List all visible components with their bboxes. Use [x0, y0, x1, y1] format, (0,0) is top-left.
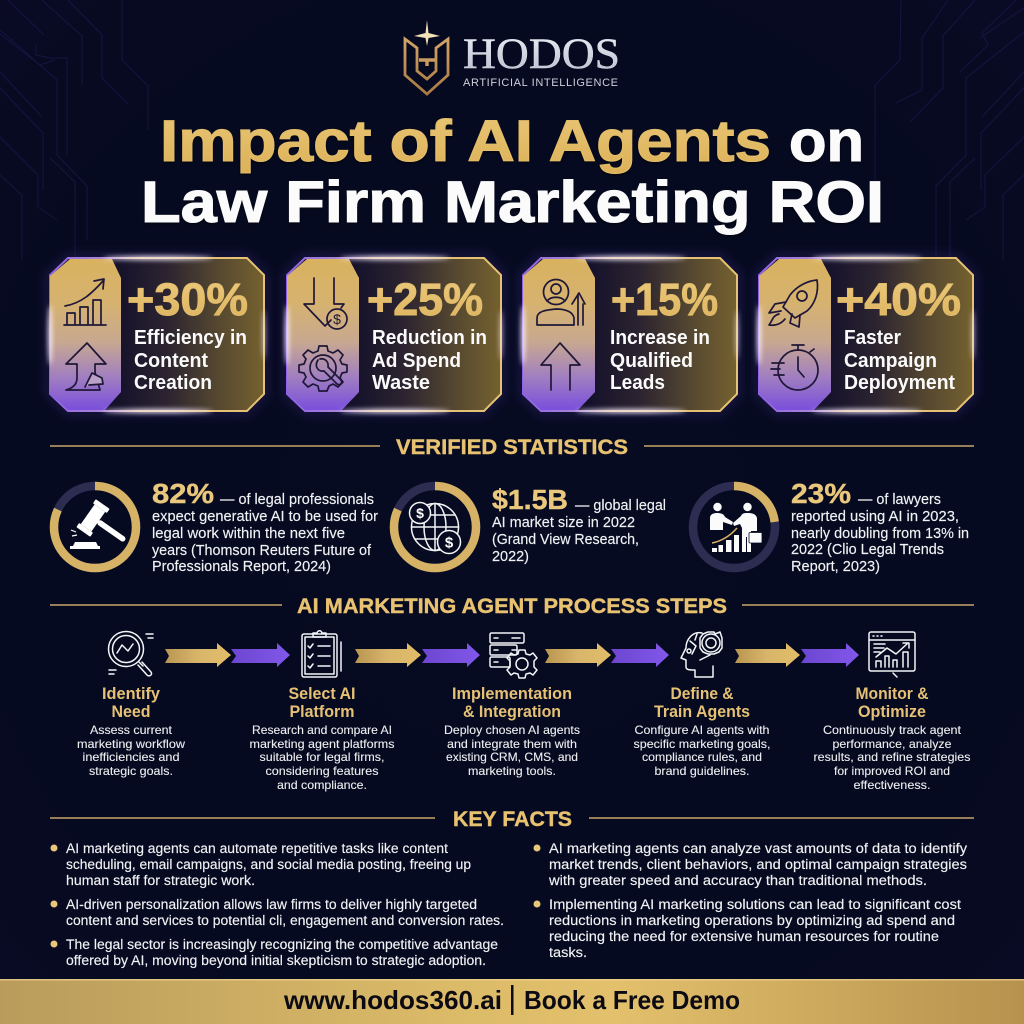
icon: analytics dashboard [869, 632, 915, 677]
step description [814, 723, 971, 792]
brand name: HODOS [463, 31, 620, 78]
stat text: — global legal [575, 497, 666, 514]
step: implementation [444, 633, 580, 778]
title: Impact of AI Agents [160, 109, 771, 174]
step: identify need [77, 632, 186, 778]
footer banner: Book a Free Demo [524, 985, 740, 1015]
stat text: — of legal professionals [220, 491, 374, 508]
icon: handshake with chart [710, 503, 762, 552]
arrows: step 3 to 4 [545, 643, 669, 667]
metric label: Content [134, 350, 208, 372]
stat text [152, 478, 378, 575]
logo [405, 20, 620, 94]
step title: Optimize [858, 703, 926, 721]
title: Law Firm Marketing ROI [141, 170, 884, 235]
icon: AI head with gear [681, 632, 722, 677]
icon: globe with coins [410, 502, 460, 554]
key facts: right column: with greater speed and accuracy than traditional methods. [548, 873, 927, 889]
step description: brand guidelines. [654, 764, 750, 778]
key facts: right column: reductions in marketing operations by optimizing ad spend and [549, 913, 955, 929]
key facts: left column [50, 841, 504, 969]
icon: down arrow with dollar [304, 278, 347, 329]
step title [288, 685, 356, 721]
donut chart market size [394, 486, 476, 568]
stat text: years (Thomson Reuters Future of [152, 542, 372, 559]
step description [77, 723, 186, 778]
metric label: Leads [610, 372, 665, 394]
icon: gavel [70, 499, 135, 554]
metric label: Qualified [610, 350, 693, 372]
heading: key facts: KEY FACTS [453, 808, 572, 831]
icon: magnifier with graph [108, 632, 153, 676]
step description: Deploy chosen AI agents [444, 723, 580, 737]
step description: suitable for legal firms, [260, 750, 384, 764]
metric label: Increase in [610, 327, 710, 349]
key facts: right column: Implementing AI marketing solutions can lead to significant cost [549, 897, 961, 913]
metric label: Ad Spend [372, 350, 461, 372]
stat text: (Grand View Research, [492, 531, 639, 548]
stat text: expect generative AI to be used for [152, 508, 378, 525]
icon: server and gear [490, 633, 537, 678]
step title [452, 685, 572, 721]
stat text: Report, 2023) [791, 558, 880, 575]
brand tagline: ARTIFICIAL INTELLIGENCE [463, 77, 618, 89]
metric label [134, 327, 247, 394]
key facts: right column: reducing the need for extensive human resources for routine [549, 929, 939, 945]
step title [102, 685, 161, 721]
step: define and train [634, 632, 770, 778]
footer banner: www.hodos360.ai [283, 985, 502, 1015]
step description: results, and refine strategies [814, 750, 971, 764]
stat text: $1.5B [492, 484, 568, 515]
step description: compliance rules, and [642, 750, 762, 764]
panel: metric card efficiency [48, 256, 266, 413]
step description: Continuously track agent [823, 723, 962, 737]
stat text: legal work within the next five [152, 525, 345, 542]
icon: globe with coins: $ [416, 505, 424, 521]
metric label [372, 327, 487, 394]
step description [250, 723, 395, 792]
stat text: AI market size in 2022 [492, 514, 635, 531]
stat: 1.5B market [394, 484, 666, 568]
donut chart 82% [54, 486, 136, 568]
donut chart 23% [693, 486, 775, 568]
panel: metric card campaign deployment [757, 256, 974, 413]
icon: clipboard checklist [302, 631, 341, 677]
step description: performance, analyze [832, 737, 952, 751]
key facts: left column: The legal sector is increasingly recognizing the competitive advantage [66, 937, 498, 953]
metric label: Reduction in [372, 327, 487, 349]
metric value: +40% [836, 274, 961, 325]
metric value: +30% [127, 274, 248, 325]
step description: existing CRM, CMS, and [446, 750, 578, 764]
step description: Assess current [90, 723, 173, 737]
step title [654, 685, 750, 721]
metric value: +25% [367, 274, 483, 325]
key facts: right column [534, 841, 968, 961]
key facts: left column: AI marketing agents can automate repetitive tasks like content [66, 841, 448, 857]
step description: specific marketing goals, [634, 737, 770, 751]
step description: Configure AI agents with [634, 723, 770, 737]
stat: 23 percent [693, 478, 969, 575]
step title: Train Agents [654, 703, 750, 721]
stat text: nearly doubling from 13% in [791, 525, 969, 542]
key facts: right column: market trends, client behaviors, and optimal campaign strategies [549, 857, 967, 873]
stat text: Professionals Report, 2024) [152, 558, 331, 575]
stat text: 2022) [492, 548, 529, 565]
step description: and compliance. [277, 778, 367, 792]
stat text: 23% [791, 478, 851, 509]
metric label: Campaign [844, 350, 937, 372]
heading: verified statistics: VERIFIED STATISTICS [396, 436, 628, 459]
key facts: left column: human staff for strategic work. [66, 873, 255, 889]
icon: stopwatch [771, 345, 818, 390]
metric label: Creation [134, 372, 212, 394]
metric label [610, 327, 710, 394]
key facts: left column: scheduling, email campaigns, and social media posting, freeing up [66, 857, 471, 873]
icon: person with rising arrow [537, 280, 585, 325]
heading: process steps: AI MARKETING AGENT PROCESS STEPS [297, 595, 727, 618]
panel: metric card qualified leads [521, 256, 738, 413]
icon: up arrow [541, 343, 580, 390]
step title: Identify [102, 685, 161, 703]
metric label: Waste [372, 372, 430, 394]
step description: strategic goals. [89, 764, 173, 778]
metric label: Faster [844, 327, 901, 349]
key facts: left column: offered by AI, moving beyond initial skepticism to strategic adoption. [66, 953, 486, 969]
arrows: step 1 to 2 [165, 643, 290, 667]
icon: up arrow with tag [66, 343, 106, 390]
step title: & Integration [463, 703, 561, 721]
icon: gear with wrench [299, 346, 347, 391]
panel: metric card ad spend [285, 256, 502, 413]
step description: marketing workflow [77, 737, 186, 751]
stat text: 2022 (Clio Legal Trends [791, 541, 944, 558]
step title: Need [112, 703, 150, 721]
stat text: reported using AI in 2023, [791, 508, 959, 525]
step title: Define & [670, 685, 734, 703]
step title: Monitor & [856, 685, 929, 703]
step description: considering features [266, 764, 379, 778]
step: select platform [250, 631, 395, 792]
stat text [492, 484, 666, 565]
step title: Platform [290, 703, 354, 721]
stat text: — of lawyers [858, 491, 941, 508]
step title: Implementation [452, 685, 572, 703]
step title: Select AI [288, 685, 356, 703]
stat text [791, 478, 969, 575]
arrows: step 2 to 3 [355, 643, 480, 667]
title: on [789, 109, 864, 174]
step title [856, 685, 929, 721]
metric label: Deployment [844, 372, 955, 394]
stat text: 82% [152, 478, 214, 509]
footer banner [0, 979, 1024, 1024]
metric value: +15% [611, 274, 718, 325]
step description: Research and compare AI [252, 723, 392, 737]
key facts: left column: content and services to potential cli, engagement and conversion rates. [66, 913, 504, 929]
step description: effectiveness. [854, 778, 930, 792]
icon: down arrow with dollar: $ [333, 311, 341, 327]
step description [634, 723, 770, 778]
step description: for improved ROI and [834, 764, 950, 778]
icon: shield with H and star [405, 20, 448, 94]
key facts: right column: tasks. [549, 945, 587, 961]
step description: and integrate them with [447, 737, 577, 751]
key facts: left column: AI-driven personalization allows law firms to deliver highly targeted [66, 897, 477, 913]
step description: marketing tools. [468, 764, 556, 778]
icon: rocket [769, 280, 818, 327]
key facts: right column: AI marketing agents can analyze vast amounts of data to identify [549, 841, 968, 857]
arrows: step 4 to 5 [735, 643, 859, 667]
step: monitor and optimize [814, 632, 971, 792]
icon: growth chart [64, 279, 106, 325]
step description [444, 723, 580, 778]
icon: globe with coins: $ [445, 534, 454, 552]
title [141, 109, 884, 235]
metric label: Efficiency in [134, 327, 247, 349]
step description: marketing agent platforms [250, 737, 395, 751]
metric label [844, 327, 955, 394]
stat: 82 percent [54, 478, 378, 575]
step description: inefficiencies and [82, 750, 180, 764]
